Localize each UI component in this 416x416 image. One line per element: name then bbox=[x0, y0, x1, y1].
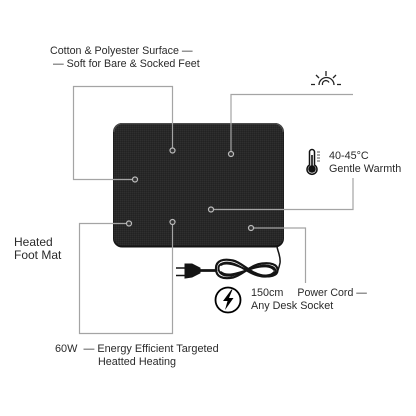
text: energy second line: Heatted Heating bbox=[98, 356, 176, 368]
power cord and plug bbox=[176, 246, 280, 278]
text: surface: Cotton & Polyester Surface — — Soft for Bare & Socked Feet bbox=[50, 45, 200, 70]
text: warmth: 40-45°C Gentle Warmth bbox=[329, 150, 401, 175]
callout line: surface bbox=[74, 86, 175, 182]
text: power cord: 150cm Power Cord — Any Desk Socket bbox=[251, 287, 367, 312]
icon: thermometer bbox=[307, 150, 320, 174]
text: energy: 60W — Energy Efficient Targeted bbox=[55, 342, 219, 354]
callout line: warmth bbox=[208, 94, 353, 212]
icon: lightning bolt bbox=[216, 288, 240, 312]
heated mat bbox=[113, 123, 284, 248]
callout line: energy bbox=[80, 220, 175, 334]
text: product name: Heated Foot Mat bbox=[14, 235, 61, 262]
callout line: power cord bbox=[248, 226, 306, 283]
icon: sun bbox=[311, 71, 341, 85]
